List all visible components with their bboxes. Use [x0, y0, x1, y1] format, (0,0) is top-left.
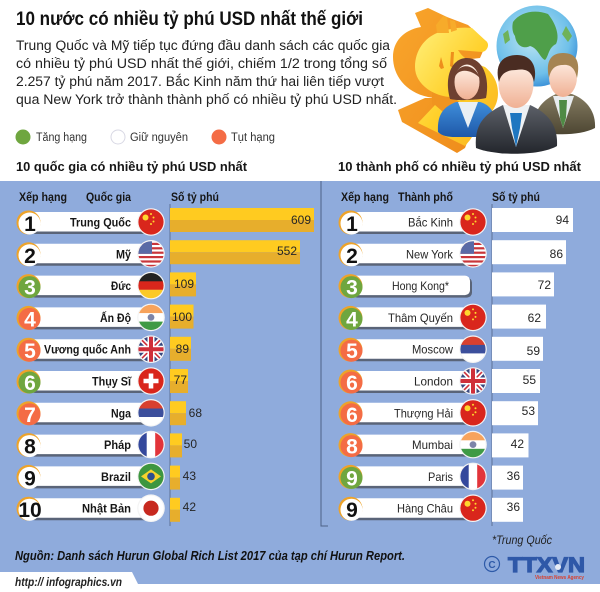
row: Trung Quốc	[16, 208, 165, 236]
bar chart: countries: 77	[174, 373, 187, 387]
icon: businessman right	[533, 53, 595, 134]
row: Hong Kong: 3	[346, 277, 358, 300]
column headers: countries: Xếp hạng	[19, 192, 67, 204]
bar chart: cities: 53	[522, 404, 535, 418]
bar chart: countries: 43	[183, 469, 196, 483]
bar chart: cities: 36	[507, 469, 520, 483]
column headers: countries: Số tỷ phú	[171, 192, 219, 204]
source: Nguồn: Danh sách Hurun Global Rich List 2017 của tạp chí Hurun Report.	[15, 549, 405, 563]
row: Nga	[16, 399, 165, 427]
column headers: cities: Xếp hạng	[341, 192, 389, 204]
row: Brazil: 9	[24, 467, 36, 490]
bar chart: countries: 109	[174, 277, 194, 291]
row: London: 6	[346, 372, 358, 395]
row: Đức	[16, 272, 165, 300]
heading: countries: 10 quốc gia có nhiều tỷ phú USD nhất	[16, 159, 248, 174]
bar chart: countries: 609	[291, 213, 311, 227]
bar chart: cities	[492, 208, 573, 522]
row: Thâm Quyến: 4	[346, 308, 358, 331]
row: Hàng Châu: Hàng Châu	[397, 502, 453, 516]
row: Nga: Nga	[111, 406, 131, 420]
row: Mỹ: 2	[24, 245, 36, 268]
row: Vương quốc Anh: Vương quốc Anh	[44, 343, 131, 357]
row: New York	[338, 240, 487, 268]
row: Nhật Bản	[16, 494, 165, 522]
bar chart: cities: 86	[550, 247, 563, 261]
row: Mumbai	[338, 431, 487, 459]
heading: cities: 10 thành phố có nhiều tỷ phú USD nhất	[338, 159, 582, 174]
row: Hàng Châu: 9	[346, 499, 358, 522]
row: New York: 2	[346, 245, 358, 268]
bar chart: countries	[170, 208, 314, 522]
legend	[16, 130, 275, 144]
icon: businessman centre	[476, 55, 557, 154]
intro text: Trung Quốc và Mỹ tiếp tục đứng đầu danh sách các quốc gia	[16, 38, 390, 54]
row: London	[338, 367, 487, 395]
logo: TTXVN: Vietnam News Agency	[535, 575, 585, 581]
logo: TTXVN	[484, 554, 585, 581]
row: Moscow: Moscow	[412, 343, 453, 357]
row: Vương quốc Anh	[16, 335, 165, 363]
row: Pháp	[16, 431, 165, 459]
bar chart: countries: 89	[176, 342, 189, 356]
column headers: cities: Số tỷ phú	[492, 192, 540, 204]
column headers: countries: Quốc gia	[86, 192, 132, 204]
column headers: cities: Thành phố	[398, 192, 453, 204]
row: Nga: 7	[24, 404, 36, 427]
legend: Tụt hạng	[231, 132, 275, 144]
row: Paris	[338, 463, 487, 490]
website url: http:// infographics.vn	[15, 577, 122, 589]
row: Hong Kong	[338, 274, 472, 300]
row: Mỹ: Mỹ	[116, 247, 131, 261]
row: Bắc Kinh: 1	[346, 213, 358, 236]
row: Hàng Châu	[338, 494, 487, 522]
row: Thụy Sĩ: 6	[24, 372, 36, 395]
row: Nhật Bản: 10	[18, 499, 42, 522]
intro text: 2.257 tỷ phú năm 2017. Bắc Kinh năm thứ hai liên tiếp vượt	[16, 73, 384, 90]
bar chart: cities: 62	[528, 311, 541, 325]
row: Moscow: 5	[346, 340, 358, 363]
row: Pháp: 8	[24, 436, 36, 459]
row: Ấn Độ	[16, 304, 165, 331]
bar chart: cities: 42	[511, 437, 524, 451]
row: Nhật Bản: Nhật Bản	[82, 502, 131, 516]
bar chart: cities: 55	[523, 373, 536, 387]
row: Thâm Quyến	[338, 304, 487, 331]
bar chart: cities: 72	[538, 278, 551, 292]
legend: Tăng hạng	[36, 132, 87, 144]
legend: Giữ nguyên	[130, 132, 188, 144]
row: Đức: Đức	[111, 279, 131, 293]
intro text: qua New York trở thành thành phố có nhiều tỷ phú USD nhất.	[16, 92, 397, 108]
icon: globe	[496, 6, 578, 86]
bar chart: countries: 68	[189, 406, 202, 420]
row: Bắc Kinh: Bắc Kinh	[408, 214, 453, 230]
axis lines	[170, 204, 492, 526]
bar chart: cities: 94	[556, 213, 569, 227]
row: Paris: Paris	[428, 470, 453, 484]
icon: dollar sign	[393, 8, 498, 153]
panel: blue background	[0, 181, 600, 584]
logo: TTXVN: C	[488, 560, 496, 571]
row: Brazil: Brazil	[101, 470, 131, 484]
row: Trung Quốc: Trung Quốc	[70, 216, 131, 230]
row: Thượng Hải: Thượng Hải	[394, 406, 453, 420]
row: New York: New York	[406, 247, 454, 261]
bar chart: countries: 42	[183, 500, 196, 514]
row: Trung Quốc: 1	[24, 213, 36, 236]
row: Thụy Sĩ	[16, 367, 165, 395]
row: Ấn Độ: 4	[24, 308, 36, 331]
row: Hong Kong: Hong Kong*	[392, 279, 449, 293]
row: Mumbai: Mumbai	[412, 438, 453, 452]
logo: TTXVN: TTXVN	[508, 554, 585, 577]
row: Vương quốc Anh: 5	[24, 340, 36, 363]
bar chart: countries: 100	[172, 310, 192, 324]
intro text: có nhiều tỷ phú USD nhất thế giới, chiếm 1/2 trong tổng số	[16, 56, 387, 72]
bar chart: cities: 36	[507, 500, 520, 514]
illustration: dollar sign, globe and businesspeople	[393, 6, 595, 154]
row: Mumbai: 8	[346, 436, 358, 459]
bar chart: countries: 50	[184, 437, 197, 451]
row: Thâm Quyến: Thâm Quyến	[388, 311, 453, 325]
row: Đức: 3	[24, 277, 36, 300]
row: Moscow	[338, 335, 487, 363]
row: Bắc Kinh	[338, 208, 487, 236]
row: Thượng Hải: 6	[346, 404, 358, 427]
intro text	[16, 38, 397, 108]
column headers: countries	[19, 192, 219, 204]
row: Brazil	[16, 463, 165, 490]
title: 10 nước có nhiều tỷ phú USD nhất thế giới	[16, 9, 363, 30]
column headers: cities	[341, 192, 540, 204]
row: London: London	[414, 374, 453, 388]
row: Mỹ	[16, 240, 165, 268]
icon: businesswoman	[438, 58, 494, 137]
row: Pháp: Pháp	[104, 438, 131, 452]
bar chart: countries: 552	[277, 244, 297, 258]
row: Thượng Hải	[338, 399, 487, 427]
row: Paris: 9	[346, 467, 358, 490]
row: Thụy Sĩ: Thụy Sĩ	[92, 374, 132, 388]
bar chart: cities: 59	[527, 344, 540, 358]
row: Ấn Độ: Ấn Độ	[100, 310, 131, 325]
divider	[321, 181, 328, 526]
footnote: *Trung Quốc	[492, 533, 552, 547]
